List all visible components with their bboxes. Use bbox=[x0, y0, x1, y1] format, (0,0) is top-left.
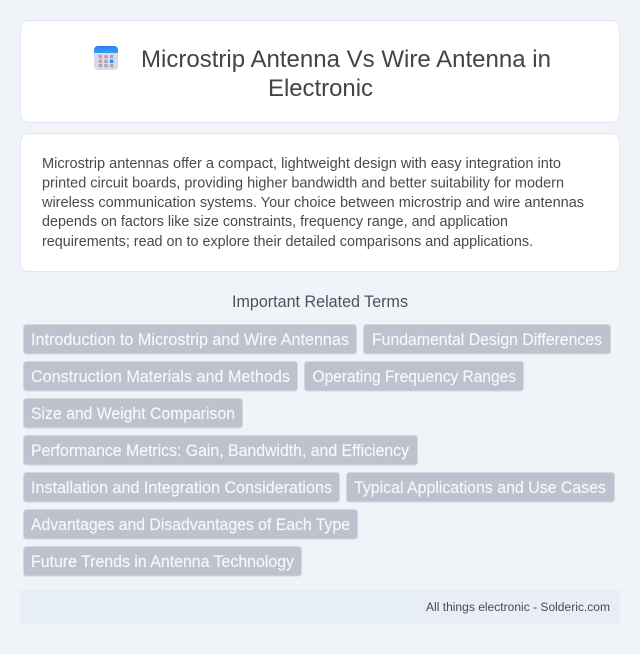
icon: calendar bbox=[94, 46, 118, 70]
tag: introduction bbox=[24, 324, 356, 354]
tag: advantages bbox=[24, 510, 358, 539]
title bbox=[141, 46, 551, 102]
tag: future trends bbox=[24, 546, 302, 576]
tag: performance metrics: Performance Metrics: Gain, Bandwidth, and Efficiency bbox=[31, 441, 410, 460]
tag: operating frequency: Operating Frequency Ranges bbox=[312, 367, 516, 386]
tag: installation bbox=[24, 472, 340, 502]
footer bbox=[20, 590, 620, 624]
footer: All things electronic - Solderic.com bbox=[426, 600, 610, 614]
description text: depends on factors like size constraints, frequency range, and application bbox=[42, 213, 508, 230]
panel: description bbox=[20, 134, 620, 272]
tag: size and weight: Size and Weight Comparison bbox=[31, 404, 235, 423]
description text: printed circuit boards, providing higher bandwidth and better suitability for modern bbox=[42, 174, 564, 192]
tag: installation: Installation and Integration Considerations bbox=[31, 478, 332, 497]
panel: title card bbox=[20, 20, 620, 122]
tag: size and weight bbox=[24, 398, 242, 428]
tag list bbox=[24, 324, 614, 576]
title: Electronic bbox=[268, 75, 373, 102]
tag: construction bbox=[24, 362, 298, 391]
description text: Microstrip antennas offer a compact, lightweight design with easy integration into bbox=[42, 155, 561, 172]
description text: wireless communication systems. Your choice between microstrip and wire antennas bbox=[41, 194, 584, 211]
description text bbox=[41, 155, 584, 250]
description text: requirements; read on to explore their detailed comparisons and applications. bbox=[42, 233, 533, 250]
tag: fundamental design bbox=[364, 324, 610, 354]
tag: typical applications bbox=[346, 472, 614, 502]
title: Microstrip Antenna Vs Wire Antenna in bbox=[141, 46, 551, 73]
tag: advantages: Advantages and Disadvantages of Each Type bbox=[31, 515, 350, 534]
tag: performance metrics bbox=[24, 436, 418, 465]
tag: construction: Construction Materials and Methods bbox=[31, 367, 290, 386]
heading: important related terms: Important Related Terms bbox=[232, 293, 408, 311]
tag: typical applications: Typical Applications and Use Cases bbox=[354, 478, 606, 497]
tag: operating frequency bbox=[304, 362, 524, 391]
tag: introduction: Introduction to Microstrip and Wire Antennas bbox=[31, 330, 349, 349]
tag: fundamental design: Fundamental Design Differences bbox=[372, 330, 602, 349]
tag: future trends: Future Trends in Antenna Technology bbox=[31, 552, 295, 571]
